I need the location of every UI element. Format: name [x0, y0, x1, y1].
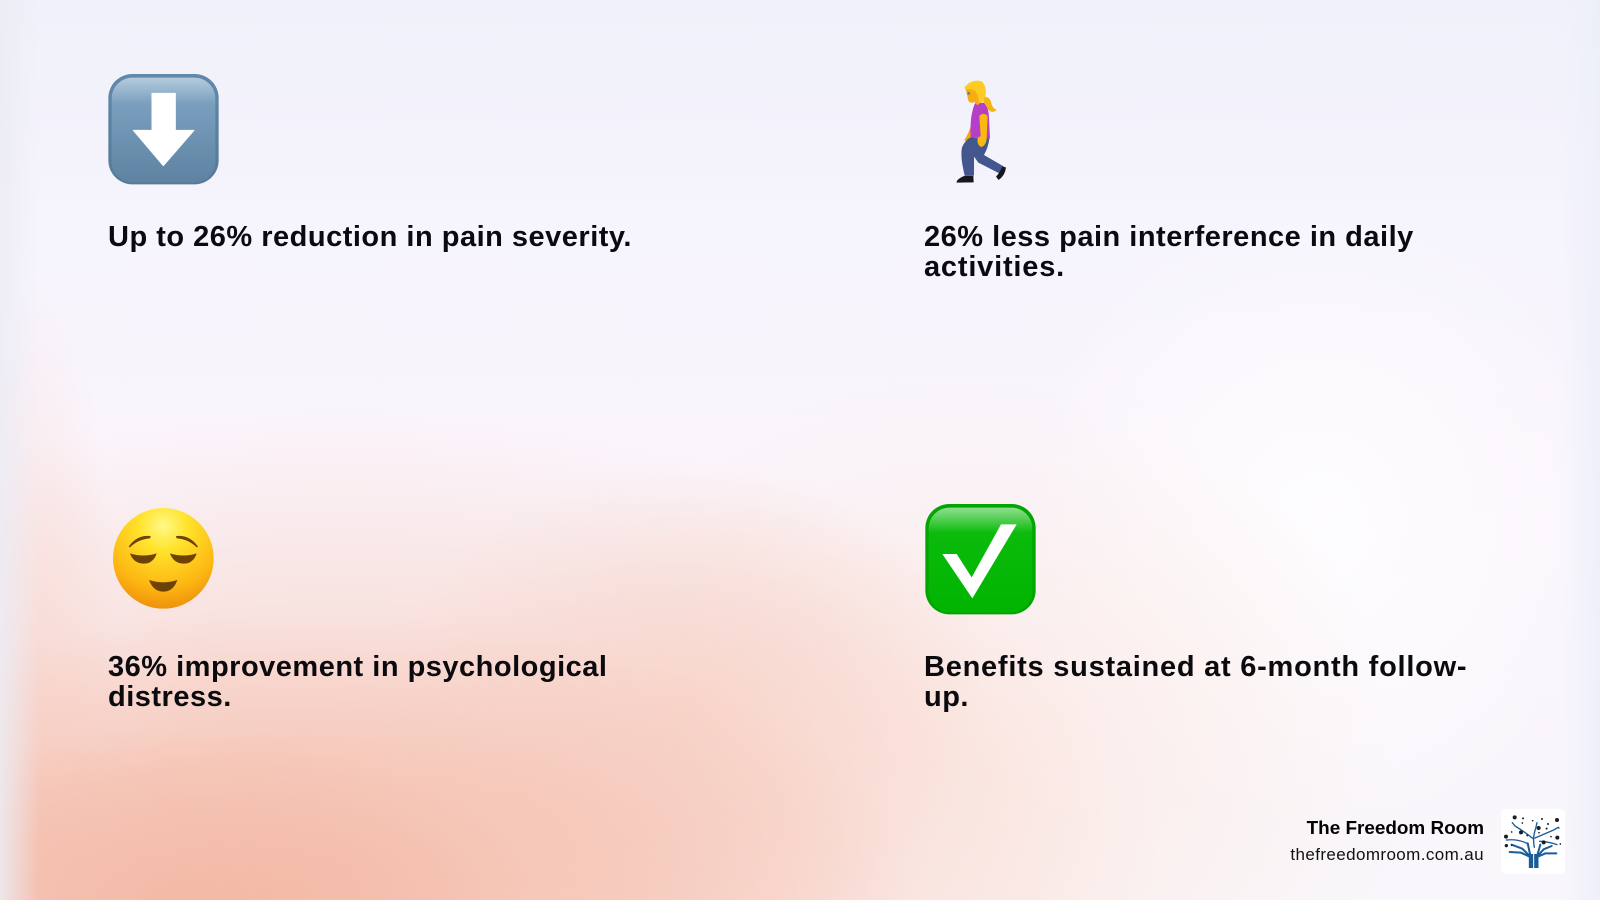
text: pain interference: activities. — [924, 251, 1065, 283]
text: pain severity: Up to 26% reduction in pain severity. — [108, 221, 632, 253]
logo: tree and hands — [1501, 809, 1565, 874]
shirt — [970, 103, 990, 139]
text: pain interference — [924, 221, 1414, 283]
neck and face — [966, 84, 983, 105]
text: benefits sustained: up. — [924, 681, 969, 713]
text: benefits sustained: Benefits sustained at 6-month follow- — [924, 651, 1467, 683]
back arm — [964, 122, 976, 143]
icon: down arrow button — [108, 74, 219, 184]
shoes — [957, 176, 974, 183]
near arm — [977, 114, 988, 147]
footer brand — [1290, 818, 1484, 864]
ponytail — [983, 97, 997, 112]
icon: relieved face — [113, 508, 214, 609]
icon: green check button — [925, 504, 1036, 614]
brand name: The Freedom Room — [1307, 818, 1484, 839]
eye — [967, 92, 970, 95]
text: psychological distress — [108, 651, 607, 713]
text: benefits sustained — [924, 651, 1467, 713]
brand url: thefreedomroom.com.au — [1290, 845, 1484, 864]
legs — [961, 137, 1004, 175]
text: pain interference: 26% less pain interference in daily — [924, 221, 1414, 253]
icon: woman walking — [956, 80, 1006, 183]
hair — [964, 81, 986, 103]
text: psychological distress: distress. — [108, 681, 232, 713]
text: psychological distress: 36% improvement in psychological — [108, 651, 607, 683]
